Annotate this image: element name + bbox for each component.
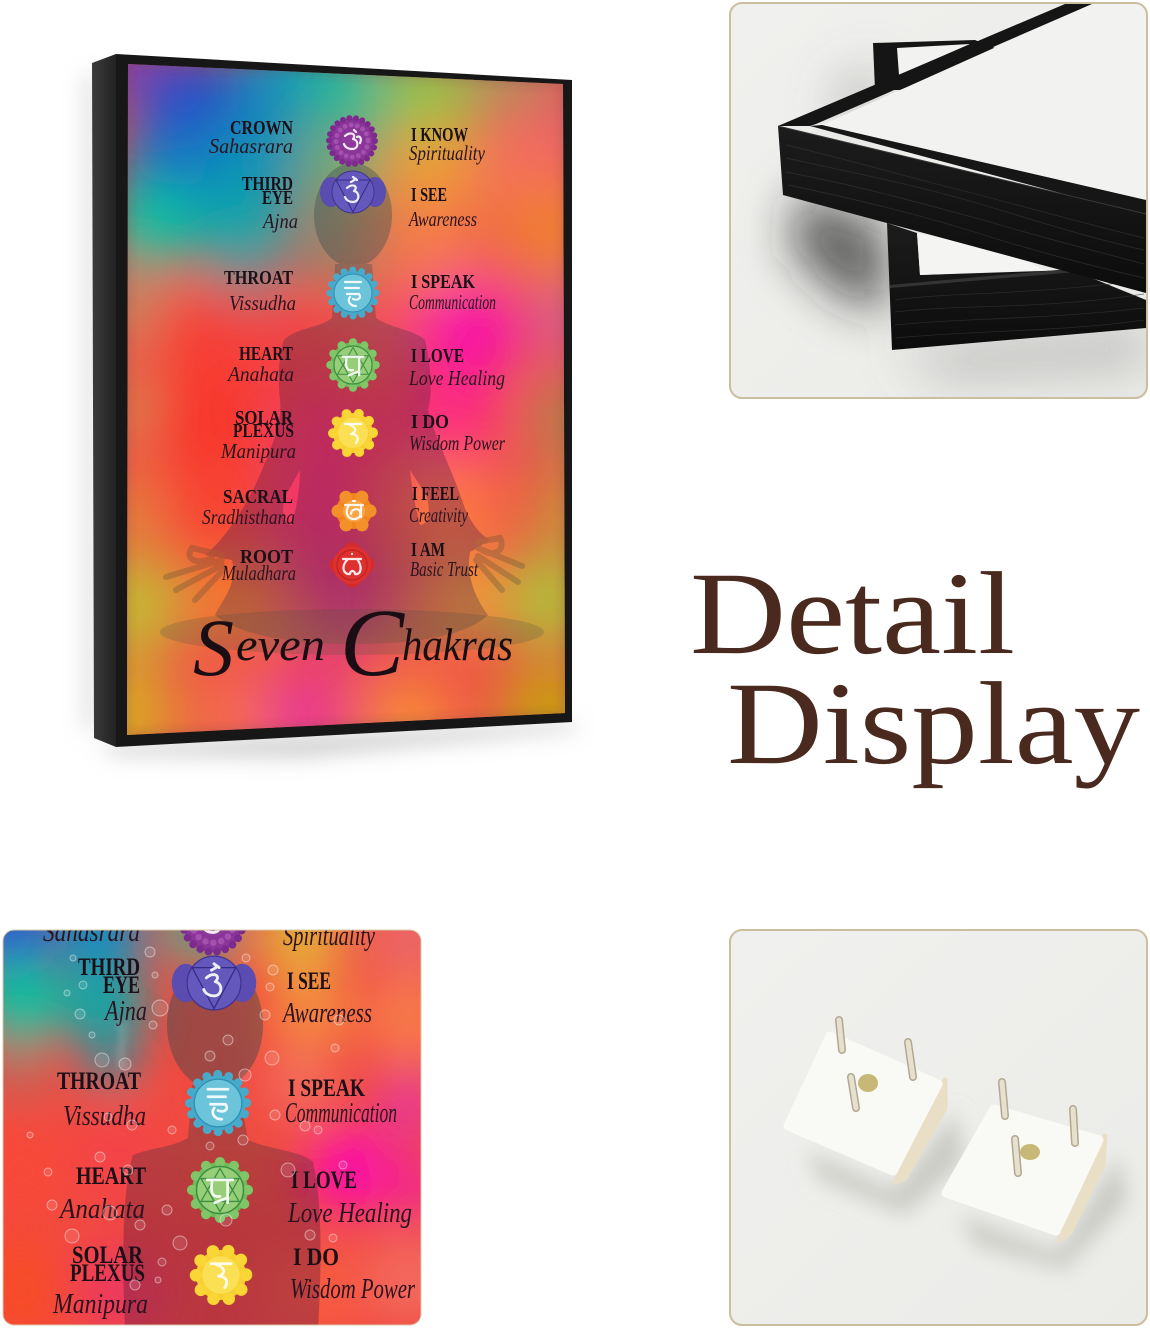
heading: Detail Display: Detail <box>690 548 1015 679</box>
labels: root: ROOT <box>240 546 294 568</box>
bracket shadows <box>805 1110 1128 1270</box>
labels: root <box>221 546 296 585</box>
chakra icon: third eye <box>320 171 386 213</box>
water droplets <box>27 947 347 1290</box>
left hand <box>166 548 225 600</box>
chakra icon: crown <box>329 118 375 164</box>
enlarged labels: HEART <box>76 1163 146 1190</box>
labels: third eye <box>242 173 298 233</box>
right bracket hole <box>1020 1144 1040 1160</box>
labels: solar plexus: PLEXUS <box>233 420 294 442</box>
frame front face <box>116 54 572 747</box>
labels: I see <box>407 184 477 231</box>
enlarged solar chakra <box>196 1250 246 1300</box>
labels: I feel: Creativity <box>409 503 468 527</box>
panel: white hanging hook brackets <box>730 930 1147 1325</box>
labels: I speak: Communication <box>409 290 496 314</box>
enlarged labels <box>43 917 415 1320</box>
frame side face <box>92 54 116 747</box>
back frame corner <box>873 40 1000 90</box>
labels: heart: Anahata <box>226 362 294 386</box>
enlarged labels: Vissudha <box>63 1101 146 1132</box>
labels: I do: Wisdom Power <box>409 431 506 455</box>
labels: I am: Basic Trust <box>410 557 479 581</box>
labels: I feel <box>409 483 468 527</box>
labels: solar plexus: Manipura <box>220 439 296 463</box>
left bracket pins <box>839 1020 913 1108</box>
enlarged labels: Love Healing <box>287 1198 412 1229</box>
labels: I do: I DO <box>411 411 449 433</box>
labels: crown: Sahasrara <box>209 134 293 158</box>
chakra icon: solar plexus <box>333 413 373 453</box>
labels: I see: I SEE <box>411 184 447 206</box>
labels: I know: I KNOW <box>411 124 468 146</box>
front frame face <box>778 126 1146 293</box>
poster title: Seven Chakras: S <box>193 602 234 693</box>
right bracket <box>946 1082 1105 1240</box>
poster title: Seven Chakras: hakras <box>402 619 513 670</box>
enlarged heart chakra <box>192 1162 248 1218</box>
labels: crown: CROWN <box>230 117 293 139</box>
enlarged labels: EYE <box>103 972 140 999</box>
poster title: Seven Chakras: even <box>236 619 325 670</box>
enlarged labels: I SPEAK <box>288 1075 365 1102</box>
canvas surface <box>823 48 1000 142</box>
top frame strip <box>778 4 1092 126</box>
chakra icon: root <box>327 540 377 590</box>
meditation mat <box>160 609 544 655</box>
enlarged labels: SOLAR <box>72 1242 144 1269</box>
enlarged labels: Wisdom Power <box>290 1274 415 1305</box>
steam wisp <box>120 1022 123 1070</box>
heading: Detail Display: Display <box>727 658 1140 789</box>
chakra icon: heart <box>330 342 376 388</box>
labels: third eye: THIRD <box>242 173 293 195</box>
labels: solar plexus: SOLAR <box>235 407 293 429</box>
left bracket hole <box>858 1074 878 1092</box>
labels: crown <box>209 117 293 158</box>
lower frame <box>887 223 1146 350</box>
enlarged labels: I LOVE <box>291 1167 357 1194</box>
enlarged labels: Ajna <box>103 996 147 1027</box>
labels: solar plexus <box>220 407 296 463</box>
right hand <box>476 538 522 590</box>
labels: sacral: SACRAL <box>223 486 293 508</box>
labels: heart <box>226 343 294 386</box>
labels: third eye: EYE <box>262 187 293 209</box>
enlarged third eye chakra <box>172 956 256 1010</box>
enlarged labels: Spirituality <box>283 921 375 952</box>
poster: framed seven chakras artwork <box>73 15 622 767</box>
labels: I do <box>409 411 506 455</box>
labels: I see: Awareness <box>407 207 477 231</box>
labels: third eye: Ajna <box>261 209 298 233</box>
labels: sacral <box>202 486 295 529</box>
labels: throat <box>224 267 296 315</box>
enlarged labels: PLEXUS <box>70 1260 145 1287</box>
labels: I speak: I SPEAK <box>411 271 475 293</box>
labels: I feel: I FEEL <box>412 483 459 505</box>
enlarged labels: I SEE <box>287 968 331 995</box>
labels: I love <box>408 345 505 390</box>
enlarged throat chakra <box>189 1074 247 1132</box>
poster title: Seven Chakras: C <box>340 589 405 696</box>
enlarged labels: Communication <box>285 1098 397 1129</box>
meditating body silhouette <box>166 163 522 644</box>
canvas edge vignette <box>127 64 565 735</box>
panel: black frame corner detail <box>730 3 1147 398</box>
enlarged labels: THIRD <box>78 954 140 981</box>
labels: I am <box>410 539 479 581</box>
enlarged labels: Sahasrara <box>43 917 140 948</box>
labels: I know: Spirituality <box>409 141 486 165</box>
labels: sacral: Sradhisthana <box>202 505 295 529</box>
labels: I am: I AM <box>411 539 445 561</box>
enlarged crown chakra <box>180 930 246 956</box>
poster cast shadow <box>84 75 578 758</box>
chakra icon: throat <box>330 270 376 316</box>
enlarged labels: Awareness <box>282 998 372 1029</box>
heading: Detail Display <box>690 548 1140 789</box>
frame shadows <box>790 65 1146 378</box>
labels: I know <box>409 124 486 165</box>
labels: root: Muladhara <box>221 561 296 585</box>
enlarged labels: I DO <box>293 1244 339 1271</box>
labels: throat: THROAT <box>224 267 294 289</box>
enlarged body silhouette <box>123 961 321 1330</box>
labels: heart: HEART <box>239 343 294 365</box>
canvas with blurred rainbow gradient <box>127 64 565 735</box>
labels: I love: I LOVE <box>411 345 464 367</box>
labels: I speak <box>409 271 496 314</box>
enlarged labels: Anahata <box>58 1194 145 1225</box>
labels: throat: Vissudha <box>229 291 296 315</box>
enlarged labels: Manipura <box>52 1289 148 1320</box>
labels: I love: Love Healing <box>408 366 505 390</box>
left bracket <box>788 1020 945 1182</box>
right bracket pins <box>1002 1082 1075 1173</box>
panel: water droplet close-up of canvas <box>0 886 454 1330</box>
enlarged labels: THROAT <box>57 1068 141 1095</box>
chakra icon: sacral <box>336 493 372 529</box>
